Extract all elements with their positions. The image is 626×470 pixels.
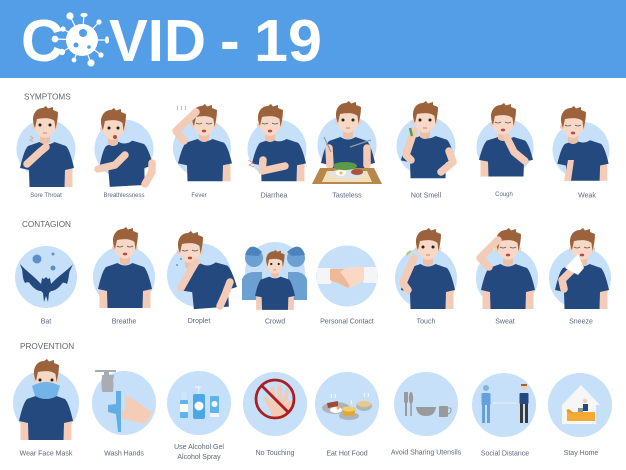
contagion: droplet: Droplet [188, 318, 210, 325]
prevention: eat hot food [315, 372, 379, 458]
prevention: stay home: Stay Home [564, 450, 598, 457]
contagion: bat: Bat [41, 318, 51, 326]
symptom: diarrhea: Diarrhea [261, 192, 288, 200]
prevention: wear face mask: Wear Face Mask [20, 450, 73, 458]
prevention: alcohol gel and spray [167, 371, 231, 461]
contagion: touch [395, 228, 457, 326]
contagion: sweat [476, 228, 538, 326]
heading: contagion: CONTAGION [22, 220, 71, 229]
prevention: social distance: Social Distance [481, 450, 529, 458]
symptom: sore throat: Sore Throat [30, 193, 62, 199]
prevention: stay home [548, 373, 612, 457]
prevention: wash hands [92, 371, 156, 458]
heading: symptoms: SYMPTOMS [24, 92, 71, 102]
symptom: not smell: Not Smell [411, 192, 442, 200]
contagion: breathe [93, 227, 155, 326]
title: - [220, 8, 240, 74]
symptom: weak [552, 106, 610, 200]
symptom: sore throat [16, 106, 76, 199]
symptom: weak: Weak [578, 192, 596, 200]
symptom: tasteless [312, 101, 382, 200]
contagion: sneeze: Sneeze [569, 318, 593, 326]
banner [0, 0, 626, 78]
contagion: sweat: Sweat [495, 318, 515, 326]
title: C [21, 8, 64, 74]
prevention: no touching: No Touching [256, 450, 294, 457]
contagion: personal contact: Personal Contact [320, 318, 374, 326]
symptom: cough: Cough [495, 192, 513, 198]
symptom: tasteless: Tasteless [332, 192, 362, 200]
symptom: cough [476, 103, 534, 198]
symptom: breathlessness: Breathlessness [103, 193, 145, 199]
contagion: personal contact [316, 246, 378, 326]
icon: virus in title [52, 13, 108, 66]
prevention: eat hot food: Eat Hot Food [326, 450, 368, 458]
symptom: fever [173, 104, 232, 199]
title: VID [109, 8, 206, 74]
contagion: bat [15, 246, 77, 326]
prevention: alcohol gel and spray: Use Alcohol Gel [174, 444, 224, 451]
contagion: sneeze [549, 228, 611, 326]
symptom: diarrhea [248, 104, 306, 200]
contagion: droplet [167, 231, 238, 325]
prevention: alcohol gel and spray: Alcohol Spray [177, 454, 221, 461]
contagion: breathe: Breathe [112, 318, 136, 326]
symptom: not smell [396, 101, 456, 200]
symptom: breathlessness [94, 108, 154, 199]
heading: prevention: PROVENTION [20, 342, 74, 351]
prevention: avoid sharing utensils [391, 372, 462, 456]
prevention: wear face mask [13, 359, 79, 458]
symptom: fever: Fever [191, 193, 207, 199]
prevention: wash hands: Wash Hands [104, 450, 144, 458]
prevention: avoid sharing utensils: Avoid Sharing Utensils [391, 450, 462, 456]
contagion: crowd: Crowd [265, 318, 285, 326]
title: 19 [254, 8, 322, 74]
prevention: social distance [472, 373, 536, 458]
title [21, 8, 322, 74]
contagion: touch: Touch [417, 318, 435, 326]
prevention: no touching [243, 372, 307, 457]
contagion: crowd [242, 242, 307, 326]
